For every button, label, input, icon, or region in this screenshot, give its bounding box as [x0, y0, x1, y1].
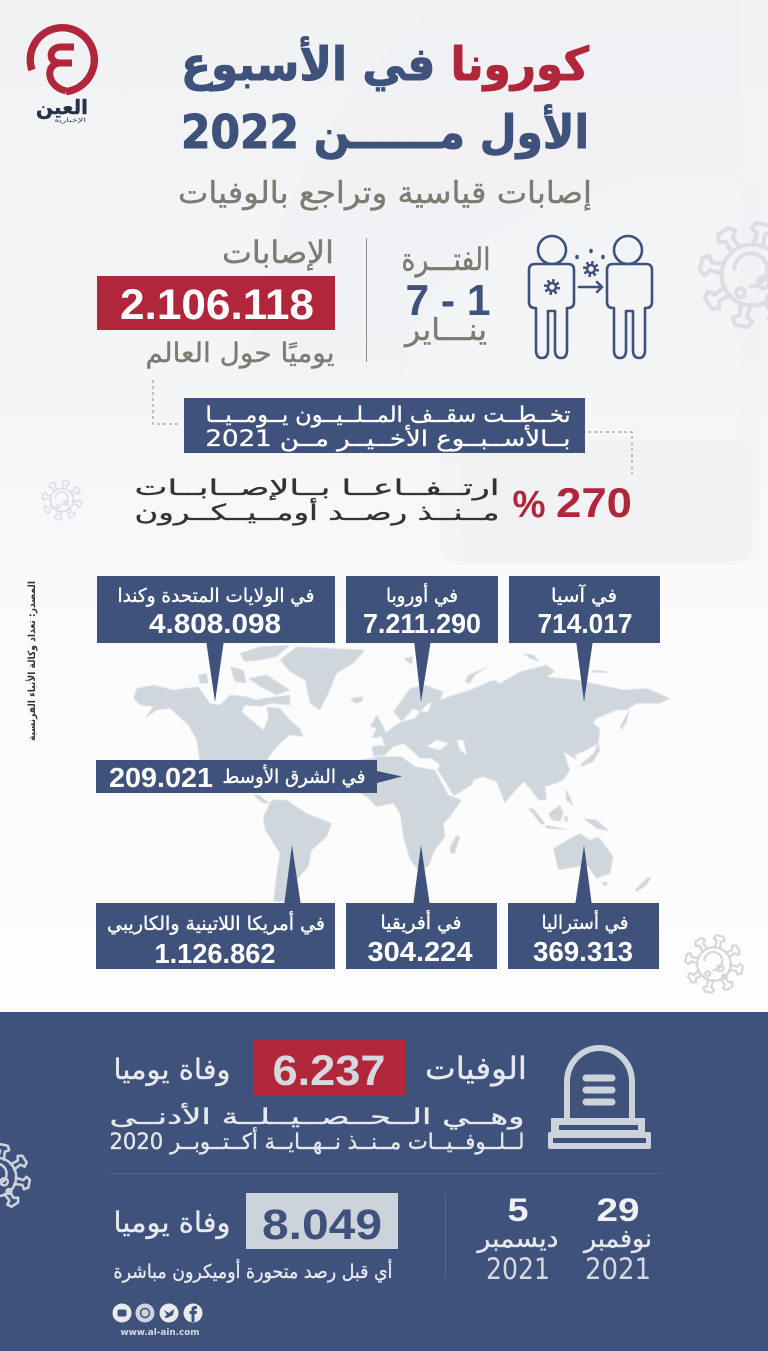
- vertical divider: [366, 238, 367, 362]
- earlier daily deaths: 8.049: [262, 1201, 382, 1249]
- logo: [30, 28, 94, 124]
- callout: Asia: [509, 576, 660, 702]
- date: 29 November 2021: [582, 1192, 652, 1286]
- dashed connector right: [588, 432, 632, 474]
- callout: Latin America and Caribbean: 1.126.862: [154, 938, 276, 969]
- callout: USA and Canada: 4.808.098: [149, 608, 281, 639]
- stat: 270 percent rise: 270: [556, 479, 632, 526]
- stat: 270 percent rise: %: [512, 484, 546, 526]
- callout: Africa: 304.224: [368, 936, 473, 967]
- callout: Middle East: في الشرق الأوسط: [222, 765, 366, 788]
- date: 5 December 2021: 2021: [486, 1252, 550, 1286]
- callout: USA and Canada: [97, 576, 335, 702]
- icon: virus transmission between two people: [529, 236, 652, 358]
- date: 5 December 2021: 5: [508, 1192, 528, 1228]
- callout: Middle East: [96, 760, 402, 793]
- callout: million ceiling: [184, 398, 585, 453]
- infections block: 2.106.118: [120, 281, 314, 329]
- callout: million ceiling: بــالأســبــوع الأخــيــر مــن 2021: [206, 425, 570, 452]
- stat: 270 percent rise: مــنــذ رصــد أومــيــكــرون: [134, 498, 500, 526]
- infections block: الإصابات: [222, 235, 334, 271]
- infections block: [97, 235, 335, 369]
- social icons: www.al-ain.com: [120, 1328, 200, 1338]
- callout: Africa: [346, 845, 497, 969]
- callout: Asia: 714.017: [538, 608, 632, 639]
- horizontal divider: [110, 1173, 660, 1174]
- callout: Europe: 7.211.290: [363, 608, 481, 639]
- infections block: يوميًا حول العالم: [146, 338, 334, 369]
- title: الأول مــــــن 2022: [181, 104, 589, 159]
- panel: deaths: [0, 1012, 768, 1351]
- period block: 7 - 1: [406, 276, 490, 325]
- date: 5 December 2021: [475, 1192, 558, 1286]
- icon: tombstone: [548, 1048, 651, 1149]
- callout: USA and Canada: في الولايات المتحدة وكندا: [118, 585, 314, 607]
- title: كورونا في الأسبوع: [181, 36, 589, 91]
- callout: Europe: [346, 576, 498, 702]
- earlier daily deaths: [114, 1193, 398, 1283]
- callout: Middle East: 209.021: [109, 762, 213, 793]
- earlier daily deaths: أي قبل رصد متحورة أوميكرون مباشرة: [114, 1259, 392, 1283]
- date: 29 November 2021: 29: [596, 1192, 640, 1228]
- date: 5 December 2021: ديسمبر: [475, 1224, 558, 1253]
- source note: المصدر: تعداد وكالة الأنباء الفرنسية: [25, 581, 38, 741]
- logo: الإخبارية: [54, 117, 87, 124]
- deaths note: لــلــوفــيــات مــنــذ نــهــايــة أكــتــوبــر 2020: [110, 1127, 524, 1155]
- period block: ينـــاير: [403, 313, 487, 348]
- callout: Latin America and Caribbean: [96, 845, 335, 969]
- social icons: [112, 1304, 202, 1338]
- deaths headline: وفاة يوميا: [114, 1053, 230, 1086]
- deaths note: وهــي الــحــصــيــلــة الأدنــى: [110, 1103, 524, 1130]
- period block: الفتـــرة: [402, 242, 490, 278]
- world map: [133, 645, 670, 902]
- stat: 270 percent rise: [134, 476, 632, 526]
- callout: Australia: 369.313: [533, 936, 633, 967]
- subtitle: إصابات قياسية وتراجع بالوفيات: [178, 176, 592, 211]
- callout: Asia: في آسيا: [551, 583, 617, 607]
- callout: Latin America and Caribbean: في أمريكا اللاتينية والكاريبي: [107, 911, 325, 935]
- callout: Australia: [508, 845, 659, 969]
- vertical divider bottom: [445, 1193, 446, 1278]
- deaths headline: الوفيات: [425, 1051, 527, 1087]
- date: 29 November 2021: 2021: [585, 1252, 651, 1286]
- title: [181, 36, 589, 159]
- decorative virus icons: [42, 222, 768, 993]
- period block: [402, 242, 490, 348]
- callout: Africa: في أفريقيا: [380, 910, 462, 934]
- dashed connector left: [153, 380, 179, 424]
- deaths note: [110, 1103, 524, 1155]
- callout: million ceiling: تخــطــت سقــف المــلــيــون يــومــيــا: [206, 403, 570, 428]
- deaths headline: 6.237: [272, 1047, 386, 1095]
- logo: العين: [36, 95, 88, 119]
- earlier daily deaths: وفاة يوميا: [114, 1206, 230, 1239]
- stat: 270 percent rise: ارتــفــاعــا بــالإصــابــات: [134, 476, 500, 501]
- callout: Australia: في أستراليا: [542, 910, 628, 934]
- callout: Europe: في أوروبا: [386, 583, 458, 607]
- date: 29 November 2021: نوفمبر: [582, 1224, 652, 1253]
- icon: virus on panel edge: [0, 1144, 30, 1210]
- deaths headline: [114, 1040, 527, 1095]
